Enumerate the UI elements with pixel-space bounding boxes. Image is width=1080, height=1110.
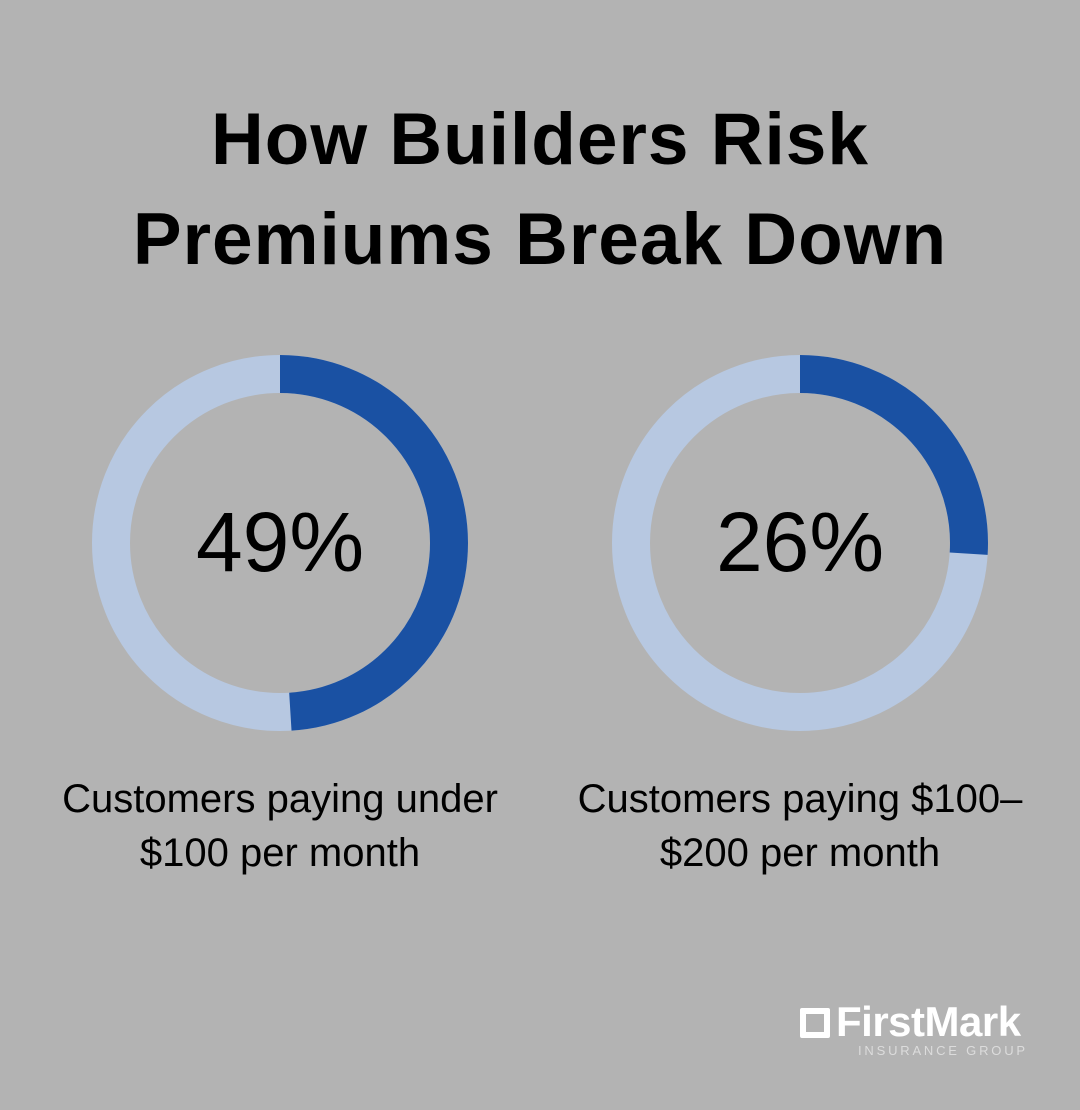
donut: 49%: 49% bbox=[196, 495, 364, 589]
label: right bbox=[578, 777, 1022, 875]
donut: 26%: 26% bbox=[716, 495, 884, 589]
title bbox=[133, 99, 947, 280]
label: left: $100 per month bbox=[140, 831, 420, 875]
donut: 49% bbox=[111, 374, 449, 712]
label: right: $200 per month bbox=[660, 831, 940, 875]
donut: 26% bbox=[631, 374, 969, 712]
logo: FirstMark bbox=[836, 998, 1021, 1045]
logo bbox=[800, 998, 1028, 1058]
title: Premiums Break Down bbox=[133, 199, 947, 280]
label: left: Customers paying under bbox=[62, 777, 498, 821]
logo: INSURANCE GROUP bbox=[858, 1043, 1028, 1058]
icon: logo square bbox=[800, 1008, 830, 1038]
title: How Builders Risk bbox=[211, 99, 869, 180]
label: left bbox=[62, 777, 498, 875]
label: right: Customers paying $100– bbox=[578, 777, 1022, 821]
